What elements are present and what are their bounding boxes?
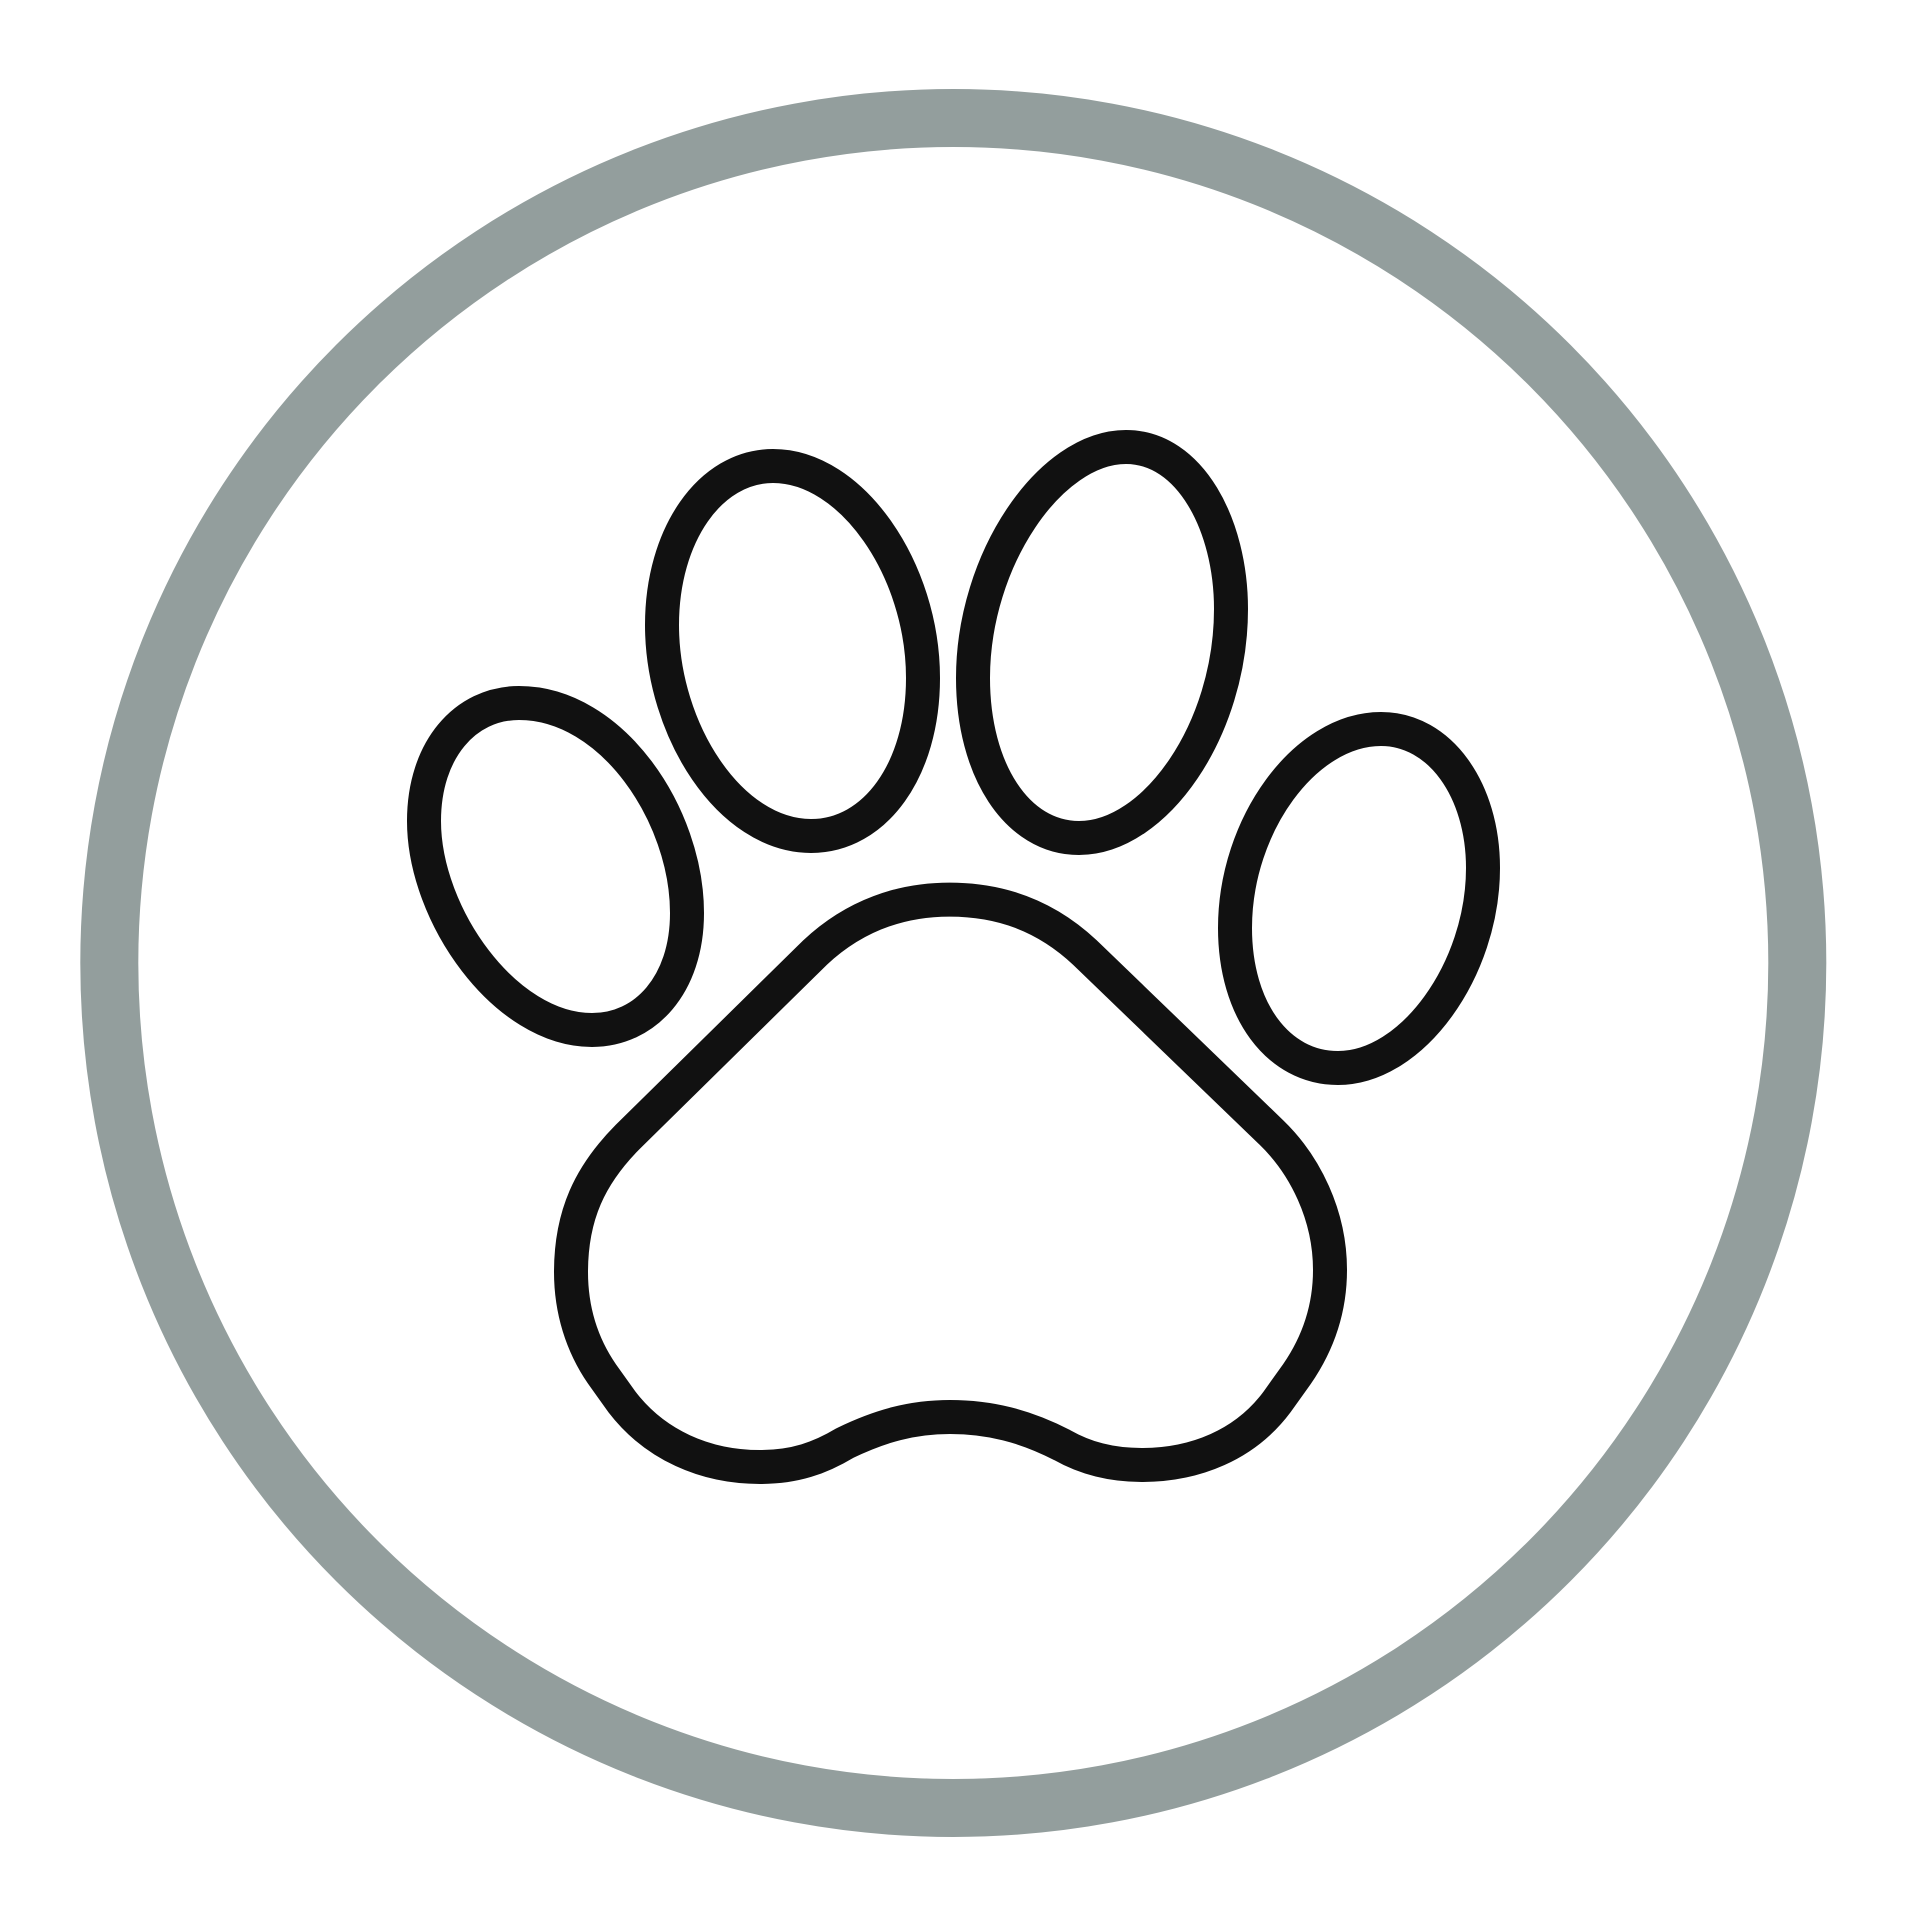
paw print	[424, 447, 1483, 1467]
main pad	[571, 900, 1330, 1467]
toe: far right	[1235, 729, 1483, 1068]
toe: inner right	[973, 447, 1231, 838]
toe: inner left	[662, 466, 923, 836]
grey circle ring	[109, 118, 1797, 1808]
toe: far left	[424, 703, 687, 1030]
